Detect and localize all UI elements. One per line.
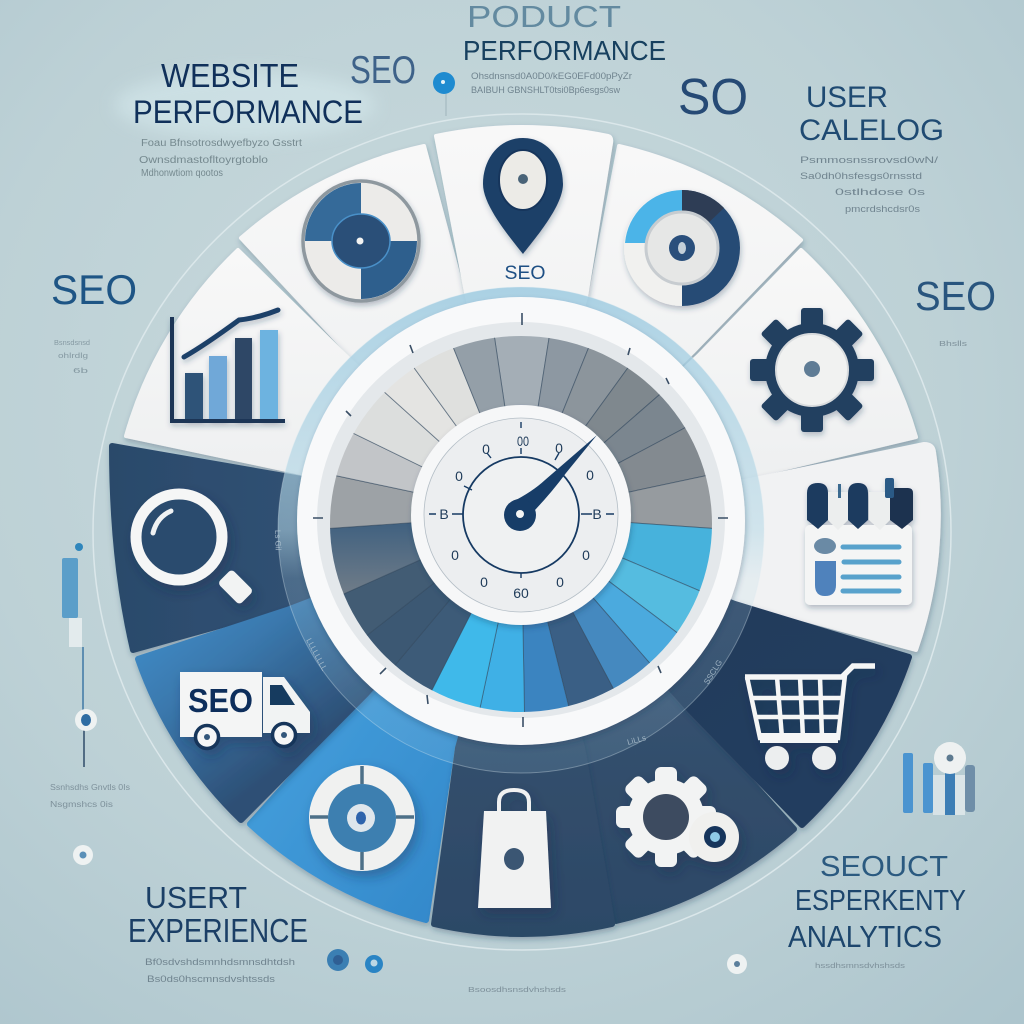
gauge: wedges (330, 336, 712, 712)
heading: product experience analytics: SEOUCT (820, 851, 948, 883)
dial numbers: 0 (556, 574, 564, 590)
dial numbers: B (592, 506, 602, 522)
light blue inner band (278, 287, 764, 773)
icon: bar chart (172, 310, 285, 421)
segment: chart white (126, 250, 521, 521)
gauge: white ring (297, 297, 745, 745)
marker: bottom-right dot (727, 954, 747, 974)
text: user description: Psmmosnssrovsd0wN/ (800, 155, 939, 165)
text: left caption: Nsgmshcs 0is (50, 800, 113, 809)
icon: navy gear (750, 308, 874, 432)
dial numbers: 0 (582, 547, 590, 563)
dial numbers: 0 (482, 441, 490, 457)
pin label: SEO (504, 263, 546, 284)
icon: shopping cart (745, 666, 875, 770)
text: left caption (50, 783, 130, 809)
text: user experience description (145, 957, 295, 984)
heading: website performance (115, 57, 375, 139)
segment: truck blue-dark (138, 521, 521, 820)
segment: top-right white (521, 146, 801, 521)
text: user experience description: Bf0sdvshdsmnhdsmnsdhtdsh (145, 957, 295, 967)
band micro labels: Ls Gil (273, 530, 283, 551)
heading: website performance: PERFORMANCE (133, 94, 363, 130)
heading: product performance: PERFORMANCE (463, 35, 666, 66)
text: seo left caption: Bsnsdsnsd (54, 340, 90, 347)
heading: product experience analytics: ESPERKENTY (795, 885, 966, 917)
icon: map pin (483, 138, 563, 254)
text: user description: Sa0dh0hsfesgs0rnsstd (800, 171, 922, 181)
text: product description: BAIBUH GBNSHLT0tsi0Bp6esgs0sw (471, 85, 621, 95)
text: user experience description: Bs0ds0hscmnsdvshtssds (147, 974, 276, 984)
dial numbers: 0 (586, 467, 594, 483)
band micro labels: LiLLs (626, 733, 647, 747)
heading: user catalog: USER (806, 81, 888, 114)
heading: user catalog: CALELOG (799, 114, 944, 147)
segment: bag dark (434, 521, 612, 934)
dial numbers: 0 (451, 547, 459, 563)
segment: gear dark (521, 521, 794, 921)
heading: user catalog (799, 81, 944, 147)
text: user description (800, 155, 939, 214)
band micro labels: SSCLG (702, 658, 724, 686)
icon: calendar list (805, 478, 913, 605)
gauge: ring ticks (313, 313, 728, 727)
icon: shopping bag (478, 790, 551, 908)
icon: white gear with node (616, 767, 739, 867)
icon: right mini bars (903, 742, 975, 815)
dial numbers (439, 433, 602, 601)
dial numbers: 0 (480, 574, 488, 590)
text: seo left caption (54, 340, 90, 375)
needle hub (504, 499, 536, 531)
gauge: center dial (411, 405, 631, 625)
label: seo right: SEO (915, 273, 996, 319)
marker: left small dot (73, 845, 93, 865)
text: seo left caption: ohlrdlg (58, 353, 88, 360)
dial numbers: 0 (555, 440, 563, 456)
needle (512, 435, 597, 510)
icon: donut (624, 190, 740, 306)
heading: user experience: EXPERIENCE (128, 912, 308, 949)
dial face (411, 405, 631, 625)
text: seo left caption: 6b (73, 368, 88, 375)
marker: blue dot (433, 72, 455, 116)
segment: target blue (250, 521, 521, 920)
icon: magnifying glass (136, 494, 254, 605)
needle pin (516, 510, 524, 518)
text: left caption: Ssnhsdhs Gnvtls 0Is (50, 783, 130, 792)
dial numbers: 00 (517, 433, 529, 449)
text: user description: pmcrdshcdsr0s (845, 204, 921, 214)
segment: top white (436, 127, 611, 521)
heading: product experience analytics: ANALYTICS (788, 919, 942, 954)
label: seo left: SEO (51, 266, 137, 313)
segment: right white (521, 444, 939, 650)
text: product description: Ohsdnsnsd0A0D0/kEG0EFd00pPyZr (471, 71, 632, 81)
band micro labels: LLLLLLLL (304, 637, 329, 673)
icon: pie gauge (303, 181, 419, 301)
band micro labels (273, 530, 724, 747)
heading: product performance: PODUCT (467, 0, 621, 34)
text: seo right caption: Bhslls (939, 341, 968, 348)
markers: bottom-left dots (327, 949, 383, 973)
text: analytics caption: hssdhsmnsdvhshsds (815, 963, 906, 970)
text: website description (139, 138, 302, 179)
segment: magnifier dark (112, 446, 521, 650)
text: website description: Mdhonwtiom qootos (141, 168, 223, 179)
heading: product experience analytics (788, 851, 966, 954)
text: bottom caption: Bsoosdhsnsdvhshsds (468, 987, 567, 994)
heading: product performance (463, 0, 666, 66)
dial numbers: B (439, 506, 449, 522)
dial numbers: 60 (513, 585, 529, 601)
panel: segmented wheel (112, 127, 939, 934)
icon: left slider (62, 543, 97, 767)
heading: user experience: USERT (145, 880, 247, 915)
segment: right-upper white (521, 250, 916, 521)
segment: top-left white (241, 146, 521, 521)
dial numbers: 0 (455, 468, 463, 484)
text: product description (471, 71, 632, 95)
segment: cart dark (521, 521, 909, 825)
label: so: SO (678, 68, 748, 125)
heading: user experience (128, 880, 308, 949)
dial inner circle (463, 457, 579, 573)
text: website description: Foau Bfnsotrosdwyefbyzo Gsstrt (141, 138, 302, 149)
text: user description: 0stlhdose 0s (835, 187, 926, 197)
dial tick marks (429, 422, 614, 578)
icon: delivery truck (180, 672, 310, 748)
icon: delivery truck: SEO (188, 682, 253, 719)
label: seo top-left: SEO (350, 49, 416, 92)
outer thin ring (93, 114, 951, 950)
text: website description: Ownsdmastofltoyrgtoblo (139, 155, 269, 166)
heading: website performance: WEBSITE (161, 57, 299, 94)
icon: target ring (309, 765, 415, 871)
